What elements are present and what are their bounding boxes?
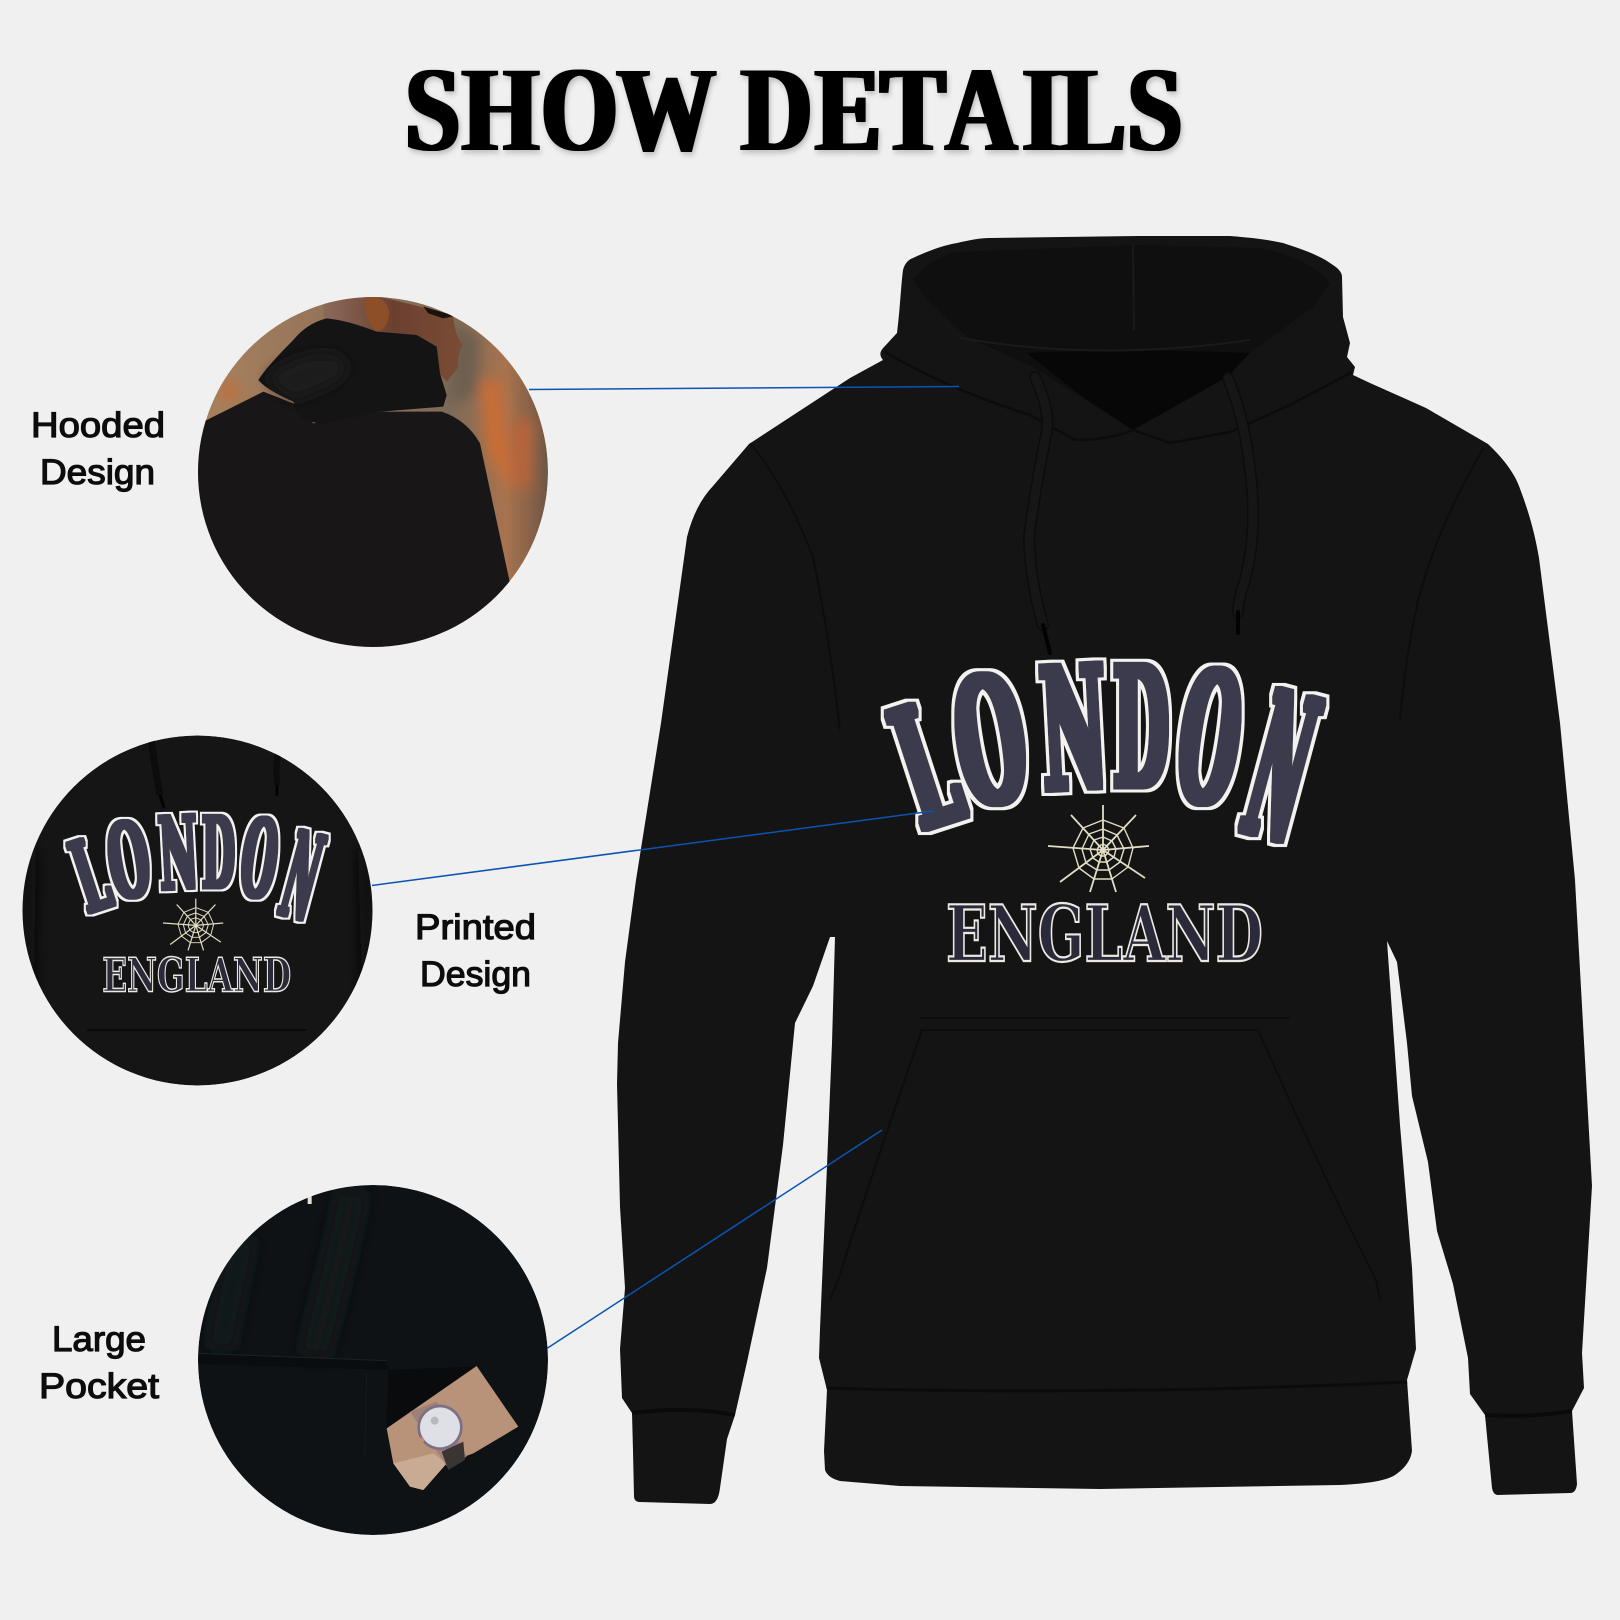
print: ENGLAND: ENGLAND: [946, 889, 1263, 980]
label: Hooded Design: Design: [40, 453, 155, 492]
hood lining: [913, 245, 1330, 430]
print: LONDON: L: [874, 667, 981, 868]
label: Hooded Design: [31, 406, 165, 492]
tick: [308, 1196, 312, 1204]
hood collar seams: [885, 352, 1352, 443]
pocket seam: [198, 1354, 330, 1364]
print: LONDON: N: [1226, 648, 1336, 889]
print: LONDON small: N: [269, 805, 335, 949]
label: Printed Design: Printed: [415, 908, 536, 947]
hood: [258, 318, 447, 423]
body: [198, 392, 510, 647]
label: Large Pocket: Pocket: [39, 1367, 159, 1406]
leader line: pocket: [548, 1130, 882, 1348]
print: LONDON small: O: [233, 795, 285, 925]
print: spider web small: [163, 899, 223, 950]
pocket: [920, 1017, 1290, 1019]
waistband and cuffs: [825, 1382, 1408, 1391]
leader line: hood: [529, 386, 959, 390]
raglan seams: [749, 442, 751, 444]
leader line: print: [372, 811, 933, 886]
sleeve shadows: [20, 850, 375, 1000]
print: LONDON small: [63, 810, 331, 924]
watch: [410, 1402, 467, 1470]
wood streaks: [220, 323, 533, 493]
forearm: [387, 1366, 518, 1490]
panel: large pocket photo: [198, 1185, 548, 1535]
title: SHOW DETAILS: [405, 41, 1182, 176]
drawstrings: [150, 730, 160, 795]
print: LONDON: O: [1166, 630, 1253, 847]
print: LONDON small: N: [156, 795, 201, 914]
label: Printed Design: [415, 908, 536, 994]
panel: hooded design photo: [180, 293, 548, 660]
print: LONDON small: L: [59, 815, 123, 936]
drawstring right: [1228, 378, 1253, 633]
print: LONDON: D: [1114, 630, 1168, 826]
label: Large Pocket: [39, 1320, 159, 1406]
label: Printed Design: Design: [420, 955, 531, 994]
neck opening: [1027, 350, 1250, 430]
head: [323, 293, 463, 382]
print: LONDON small: O: [99, 798, 158, 924]
label: Hooded Design: Hooded: [31, 406, 165, 445]
panel: printed design photo: [20, 730, 375, 1086]
pocket opening: [387, 1367, 464, 1416]
print: LONDON: [874, 630, 1336, 889]
print: LONDON: N: [1037, 630, 1111, 830]
print: LONDON: O: [942, 638, 1040, 847]
pocket: [87, 1029, 306, 1031]
drawstring left: [1029, 377, 1050, 653]
print: spider web: [1048, 805, 1149, 892]
label: Large Pocket: Large: [52, 1320, 146, 1359]
fabric folds: [220, 1190, 353, 1357]
hoodie product image: [617, 236, 1592, 1504]
print: ENGLAND small: ENGLAND: [102, 948, 291, 1003]
print: LONDON small: D: [202, 795, 235, 911]
